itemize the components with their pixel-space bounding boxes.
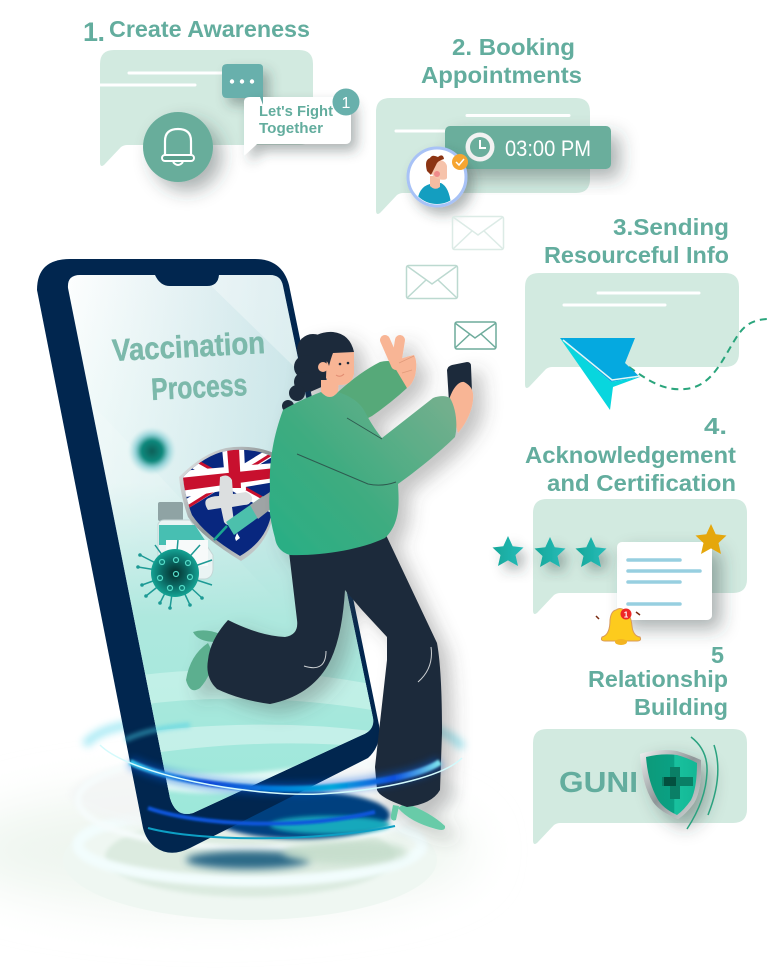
phone screen (68, 275, 374, 814)
speech bubble 1 (100, 50, 313, 166)
heading 2 (421, 34, 582, 88)
phone in hand (447, 362, 472, 402)
heading 3: Resourceful Info (544, 242, 729, 268)
avatar (408, 148, 468, 206)
shield with flag (179, 447, 275, 561)
icon: yellow bell (596, 608, 641, 645)
heading 3: 3.Sending (613, 214, 729, 240)
back blue ring (85, 722, 462, 748)
gold star (696, 524, 726, 554)
panel: booking appointments (376, 98, 611, 214)
bubble lines (564, 293, 699, 305)
heading 5 (588, 642, 728, 720)
heading 5: Building (634, 694, 728, 720)
front blue rings (100, 725, 462, 838)
icon: yellow bell: 1 (624, 610, 629, 620)
panel: acknowledgement (492, 499, 747, 645)
heading 5: 5 (711, 642, 724, 668)
trouser creases (304, 647, 431, 682)
notification badge (332, 88, 360, 116)
speech bubble 4 (533, 499, 747, 614)
icon: envelope faint (452, 216, 504, 250)
time pill: 03:00 PM (505, 136, 591, 161)
back foot (186, 630, 220, 690)
panel: sending resourceful info (525, 273, 767, 410)
message text: Let's Fight (259, 104, 333, 120)
heading 4: 4. (704, 413, 727, 439)
speech bubble 2 (376, 98, 590, 214)
sleeve creases (297, 418, 396, 485)
heading 2: 2. Booking (452, 34, 575, 60)
green torso and arm (269, 392, 456, 555)
long hair (282, 334, 330, 412)
phone screen title: Vaccination (111, 325, 266, 368)
peace hand (385, 340, 416, 388)
heading 5: Relationship (588, 666, 728, 692)
hair cap (304, 332, 354, 366)
dashed flight path (629, 319, 767, 389)
woman figure (186, 332, 473, 830)
front foot (391, 803, 445, 830)
phone screen title: Process (150, 367, 248, 407)
GUNI label: GUNI (559, 767, 638, 799)
heading 4: and Certification (547, 470, 736, 496)
blurred virus (128, 427, 176, 475)
black trousers (207, 535, 442, 807)
phone screen title (111, 325, 268, 409)
message text (259, 104, 333, 137)
bubble lines (100, 73, 222, 85)
icon: bell (143, 112, 213, 182)
virus (136, 540, 212, 610)
bubble lines (396, 116, 569, 131)
ground rings (63, 752, 460, 920)
white message bubble (244, 97, 351, 155)
icon: envelope medium (406, 266, 458, 298)
hand holding phone (449, 382, 473, 433)
phone body (37, 259, 380, 853)
phone (37, 259, 400, 853)
heading 4 (525, 413, 736, 496)
neck and face (318, 352, 354, 397)
certificate card (617, 542, 712, 620)
heading 2: Appointments (421, 62, 582, 88)
ground haze (0, 790, 475, 910)
icon: paper plane (560, 338, 640, 410)
syringe (214, 492, 272, 540)
teal stars (492, 536, 606, 567)
heading 3 (544, 214, 729, 268)
chat dots icon (222, 64, 263, 105)
heading 1: 1. (83, 17, 105, 47)
notification badge: 1 (342, 95, 351, 112)
speech bubble 5 (533, 729, 747, 844)
time pill (445, 126, 611, 169)
panel: relationship building (533, 729, 747, 844)
speech bubble 3 (525, 273, 739, 388)
icon: green shield (640, 737, 718, 829)
raised arm back (338, 361, 407, 430)
vaccine vial (158, 502, 213, 579)
icon: envelope dark (455, 322, 496, 349)
panel: create awareness (100, 50, 360, 182)
heading 1: Create Awareness (109, 16, 310, 42)
message text: Together (259, 121, 323, 137)
heading 4: Acknowledgement (525, 442, 736, 468)
